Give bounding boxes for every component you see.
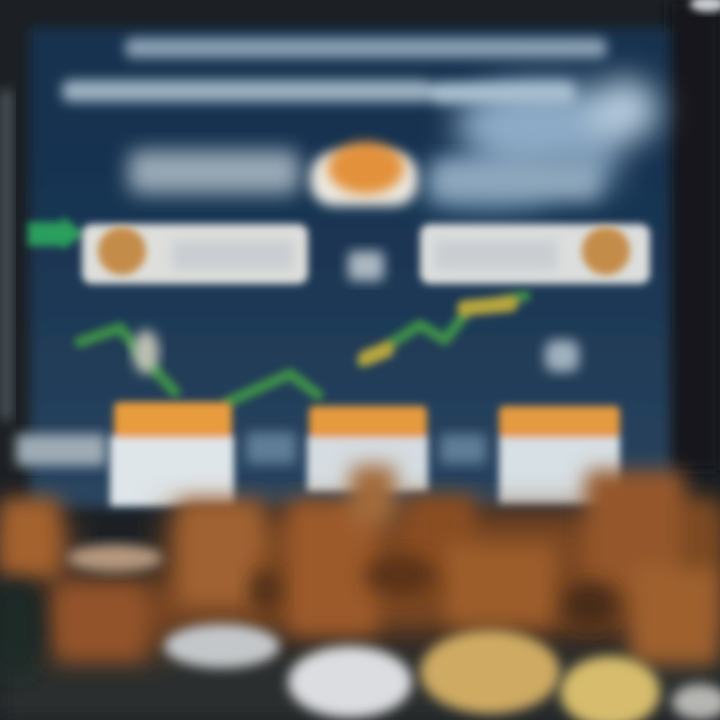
title	[62, 38, 607, 104]
card: left stat pill	[82, 224, 308, 284]
line chart: rising green trend	[80, 296, 525, 402]
header row: pills and orange badge	[128, 142, 600, 206]
card: right stat pill	[420, 224, 650, 284]
icon: green arrow	[28, 216, 85, 250]
left dark foliage	[0, 582, 40, 678]
coin stacks	[0, 465, 720, 665]
coins: foreground silver and gold	[164, 624, 720, 720]
icon: orange badge	[328, 142, 404, 194]
icon: small right symbol	[545, 340, 579, 372]
label: grey bar between cards right	[440, 434, 486, 464]
sky cloud highlight	[420, 78, 659, 209]
icon: left orange coin	[98, 227, 146, 275]
icon: right orange coin	[582, 227, 630, 275]
icon: small figure on chart	[133, 330, 159, 374]
card: middle column	[307, 406, 428, 492]
card: right column	[499, 406, 620, 504]
corner highlight	[690, 0, 720, 12]
card: left column	[110, 402, 234, 506]
label: left grey bar	[16, 434, 106, 466]
icon: central small symbol	[348, 251, 384, 281]
label: grey bar between cards	[246, 432, 296, 464]
panel: navy board	[30, 28, 670, 508]
